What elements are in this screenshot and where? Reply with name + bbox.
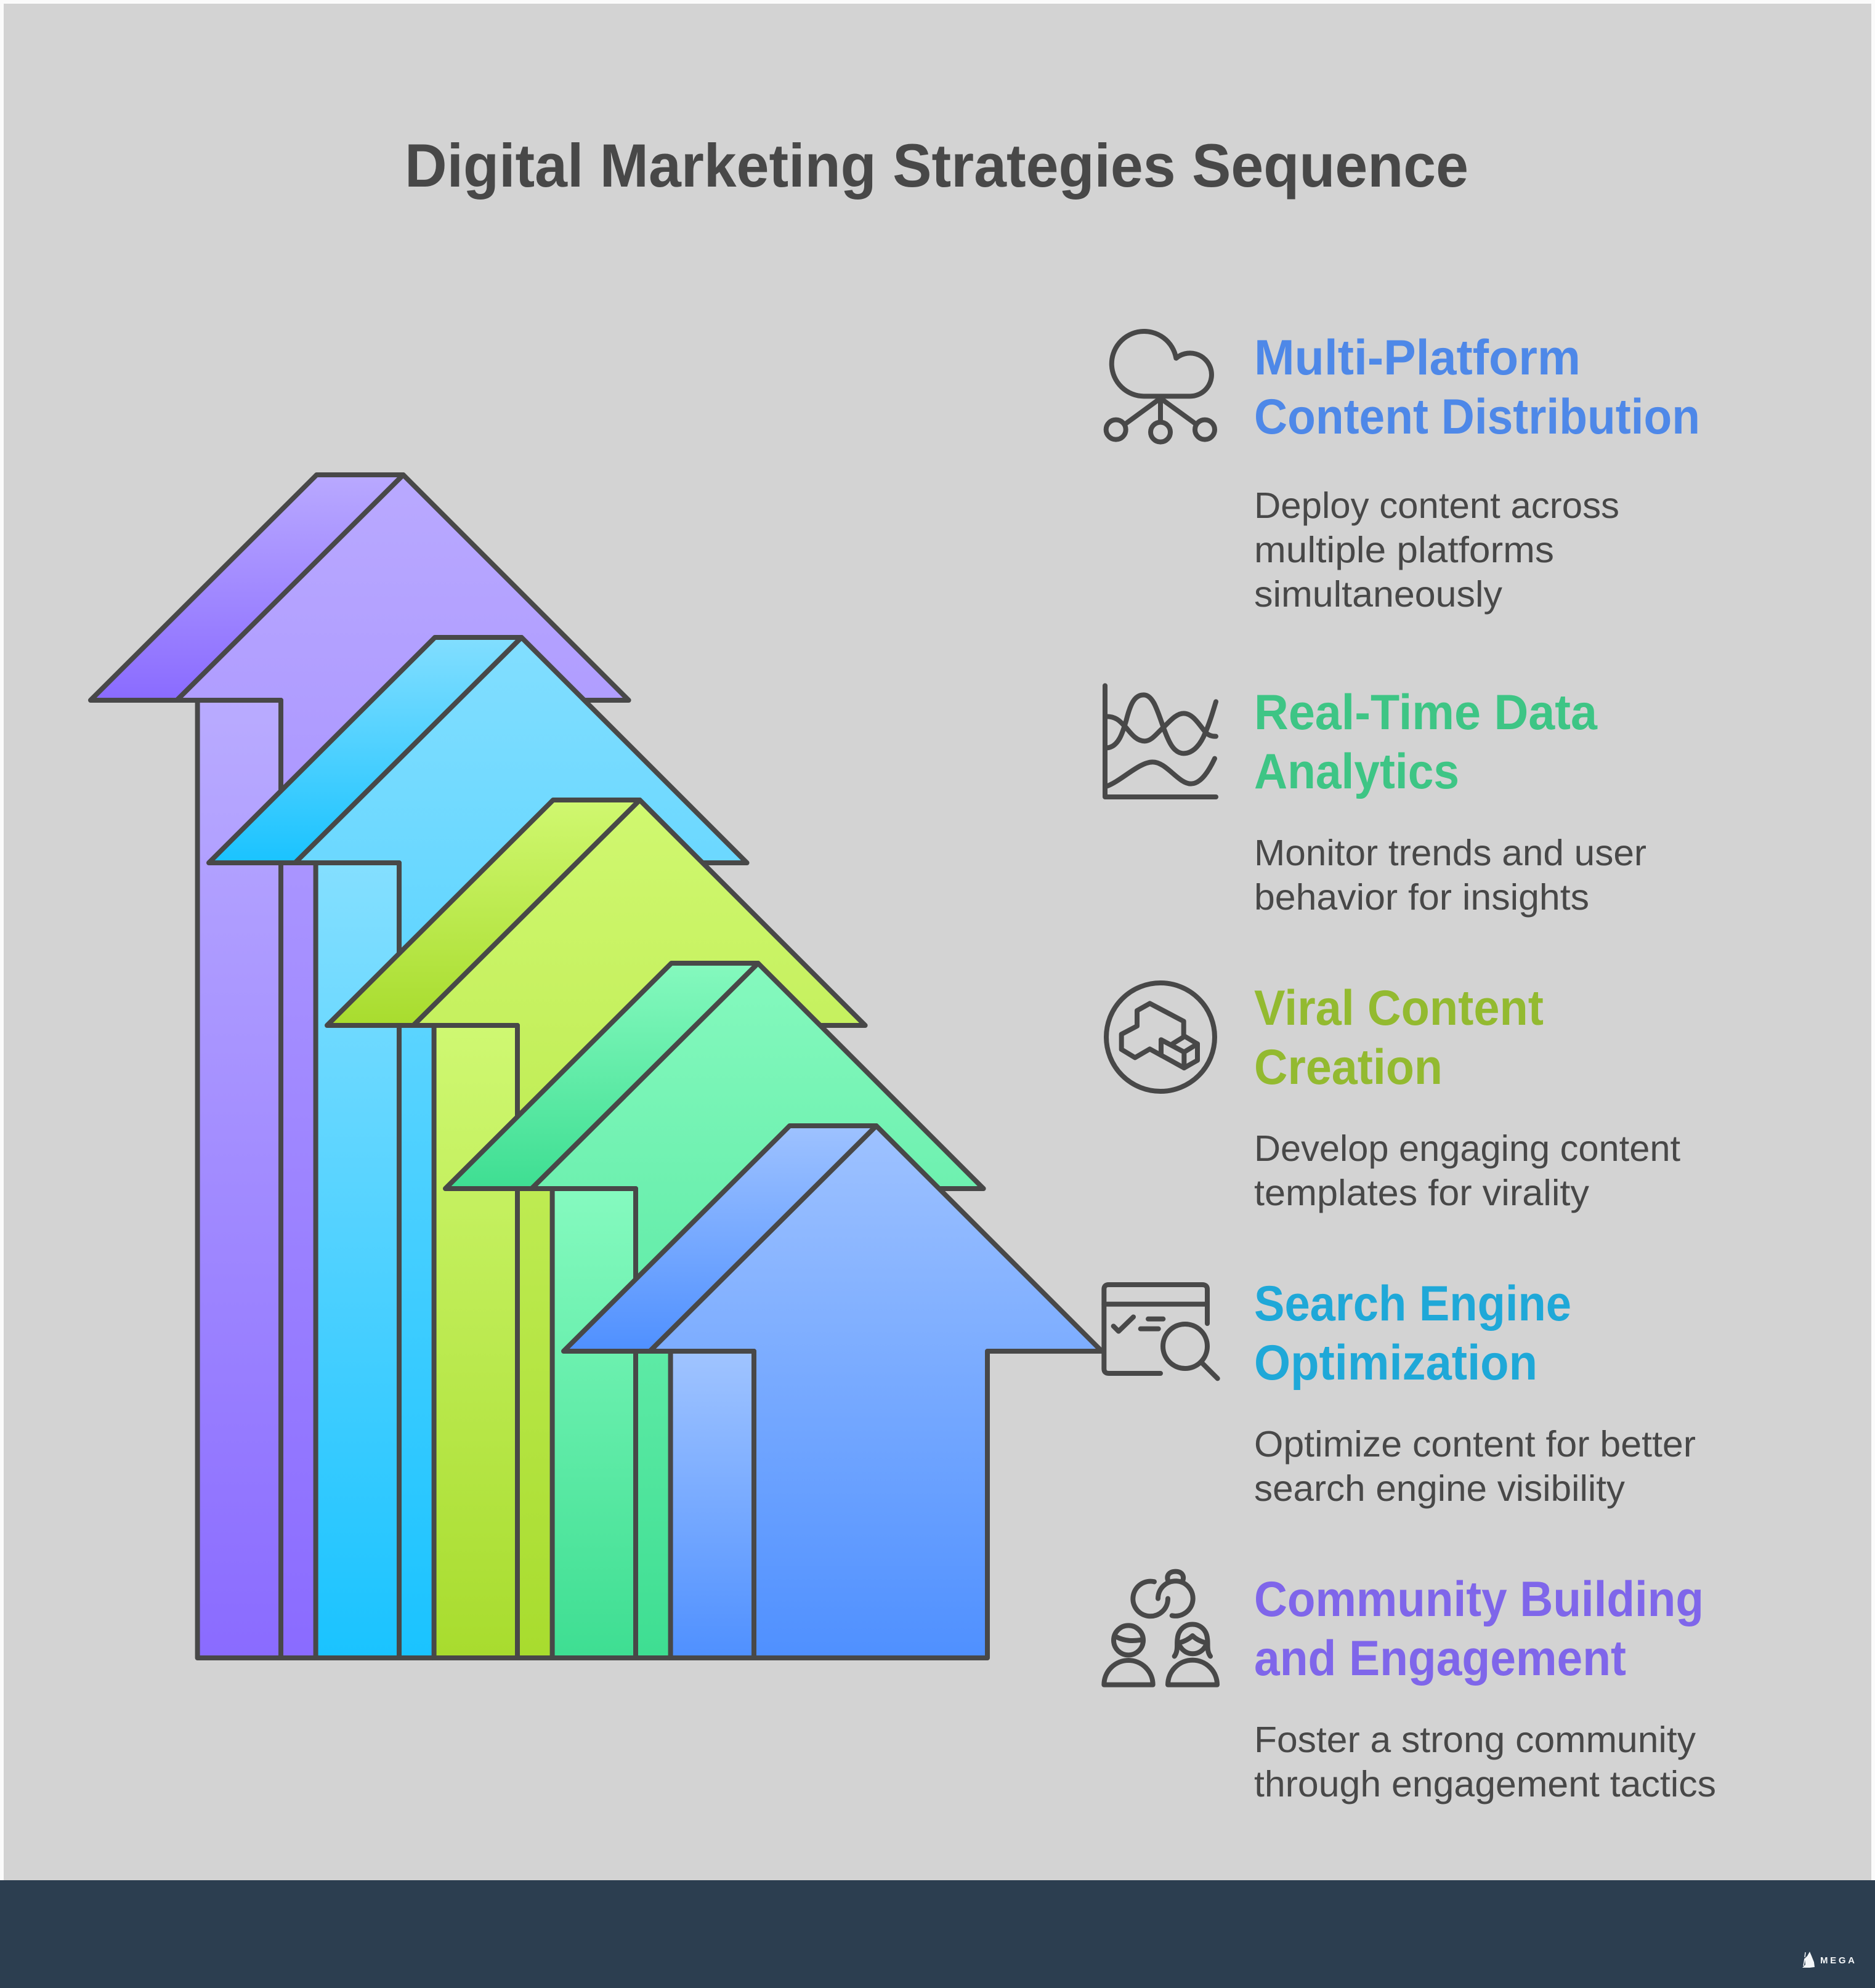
block: Viral Content Creation: templates for virality — [1254, 1173, 1590, 1213]
heading: Search Engine — [1254, 1276, 1571, 1331]
block: Community Building and Engagement — [1254, 1572, 1716, 1804]
title: Digital Marketing Strategies Sequence — [405, 131, 1468, 200]
arrow: mint (Real-Time Data Analytics) — [445, 963, 984, 1658]
arrow: lime (Viral Content Creation) — [327, 800, 865, 1658]
block: Search Engine Optimization: search engine visibility — [1254, 1468, 1626, 1509]
block: Search Engine Optimization — [1254, 1276, 1696, 1509]
footer logo: MEGA — [1802, 1952, 1855, 1968]
block: Community Building and Engagement: and Engagement — [1254, 1631, 1626, 1686]
block: Viral Content Creation — [1254, 980, 1680, 1213]
footer logo: MEGA: MEGA — [1820, 1955, 1855, 1966]
arrow: purple (Community Building) — [91, 475, 629, 1658]
block: Search Engine Optimization: Optimize content for better — [1254, 1424, 1696, 1465]
block: Real-Time Data Analytics: Analytics — [1254, 744, 1459, 799]
icon: search checklist window — [1104, 1285, 1218, 1378]
heading: Community Building — [1254, 1572, 1704, 1627]
block: Multi-Platform Content Distribution: Deploy content across — [1254, 485, 1619, 526]
block: Viral Content Creation: Creation — [1254, 1040, 1443, 1095]
icon: line chart — [1105, 685, 1216, 797]
heading: Multi-Platform — [1254, 330, 1581, 386]
icon: community people with link — [1104, 1572, 1217, 1685]
block: Multi-Platform Content Distribution: Content Distribution — [1254, 389, 1700, 445]
block: Multi-Platform Content Distribution: simultaneously — [1254, 574, 1503, 615]
block: Real-Time Data Analytics: behavior for insights — [1254, 877, 1589, 918]
block: Viral Content Creation: Develop engaging content — [1254, 1128, 1680, 1169]
heading: Real-Time Data — [1254, 685, 1598, 740]
heading: Viral Content — [1254, 980, 1544, 1036]
arrow: cyan (Search Engine Optimization) — [209, 637, 747, 1658]
block: Community Building and Engagement: Foster a strong community — [1254, 1719, 1696, 1760]
icon: 3D blocks in circle — [1106, 983, 1215, 1091]
arrow: blue (Multi-Platform Content Distribution) — [564, 1126, 1102, 1658]
block: Search Engine Optimization: Optimization — [1254, 1335, 1537, 1391]
block: Community Building and Engagement: through engagement tactics — [1254, 1764, 1716, 1804]
block: Real-Time Data Analytics: Monitor trends and user — [1254, 833, 1646, 873]
block: Real-Time Data Analytics — [1254, 685, 1646, 918]
block: Multi-Platform Content Distribution: multiple platforms — [1254, 530, 1554, 570]
icon: cloud network — [1106, 331, 1215, 442]
footer bar — [0, 1880, 1875, 1988]
block: Multi-Platform Content Distribution — [1254, 330, 1700, 615]
